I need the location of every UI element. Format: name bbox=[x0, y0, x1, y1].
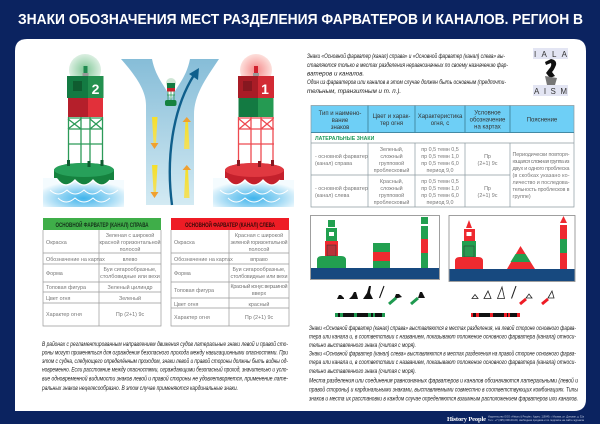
characteristics table: Условное bbox=[474, 110, 501, 116]
green buoy illustration, number 2: 2 bbox=[92, 81, 100, 97]
characteristics table: Пояснение bbox=[527, 118, 558, 124]
upper right intro text: Знаки «Основной фарватер (канал) справа» и «Основной фарватер (канал) слева» вы- bbox=[307, 53, 505, 60]
green lighted buoy bbox=[317, 220, 346, 268]
table: main fairway to the left: вверх bbox=[252, 291, 266, 297]
table: main fairway to the left: Форма bbox=[174, 271, 191, 277]
table: main fairway to the left: ОСНОВНОЙ ФАРВАТЕР (КАНАЛ) СЛЕВА bbox=[185, 220, 275, 229]
upper right intro text bbox=[307, 53, 508, 95]
characteristics table: обозначение bbox=[470, 118, 506, 124]
green buoy illustration, number 2 bbox=[43, 54, 124, 207]
characteristics table: тельность проблесков в bbox=[512, 187, 570, 193]
characteristics table: Пр bbox=[484, 154, 491, 160]
characteristics table: вание bbox=[332, 118, 349, 124]
lower right text block: тельно выставленного знака (считая с моря). bbox=[309, 342, 416, 349]
footer brand and imprint: Издательство ООО «History & People». Адрес: 119049, г. Москва, ул. Донская, д. 32а bbox=[488, 414, 584, 418]
characteristics table: пр 0,5 темн 0,5 bbox=[421, 147, 459, 153]
characteristics table: ЛАТЕРАЛЬНЫЕ ЗНАКИ bbox=[315, 136, 375, 142]
table: main fairway to the left: Характер огня bbox=[174, 315, 210, 321]
red cone buoy bbox=[507, 246, 535, 269]
characteristics table: Характеристика bbox=[418, 114, 463, 120]
table: main fairway to the left: столбовидные или вехи bbox=[230, 274, 288, 280]
table: main fairway to the right: Пр (2+1) 9с bbox=[116, 312, 144, 318]
characteristics table: огня, с bbox=[431, 121, 449, 127]
diagram: red fairway signs bbox=[449, 216, 575, 282]
red lighted buoy bbox=[455, 220, 483, 269]
characteristics table: группе) bbox=[512, 194, 531, 200]
characteristics table: - основной фарватер bbox=[315, 185, 368, 192]
table: main fairway to the left bbox=[171, 218, 289, 326]
characteristics table: ющаяся сложная группа из bbox=[512, 159, 570, 165]
characteristics table: (канал) слева bbox=[315, 193, 349, 199]
table: main fairway to the right: влево bbox=[123, 257, 137, 263]
table: main fairway to the left: полосой bbox=[249, 246, 269, 253]
table: main fairway to the right bbox=[43, 218, 161, 326]
diagram: green fairway signs bbox=[310, 216, 440, 280]
characteristics table bbox=[311, 106, 574, 207]
lower left text block: ральных знаков нецелесообразно. В этом случае применяются кардинальные знаки. bbox=[41, 385, 238, 392]
characteristics table: Зеленый, bbox=[380, 146, 404, 153]
characteristics table: личество и последова- bbox=[512, 180, 570, 186]
table: main fairway to the right: Зеленый цилиндр bbox=[108, 284, 152, 291]
table: main fairway to the right: ОСНОВНОЙ ФАРВАТЕР (КАНАЛ) СПРАВА bbox=[56, 220, 149, 229]
characteristics table: двух и одного проблеска bbox=[512, 166, 570, 172]
lower left text block: роны могут применяться для ограждения безопасного прохода между навигационными опасностями. При bbox=[41, 350, 288, 356]
characteristics table: групповой bbox=[379, 160, 404, 167]
table: main fairway to the left: Окраска bbox=[174, 240, 195, 246]
table: main fairway to the left: Обозначение на картах bbox=[174, 257, 233, 263]
lower left text block: этом с судна, следующего определённым проходом, знаки левой и правой стороны должны быть видны од- bbox=[42, 358, 288, 365]
table: main fairway to the left: Топовая фигура bbox=[174, 288, 214, 294]
lower left text block: новременно. Если расстояние между опасностями, ограждающими безопасный проход, значительно и усло- bbox=[42, 366, 288, 374]
table: main fairway to the right: Форма bbox=[46, 271, 63, 277]
characteristics table: Тип и наимено- bbox=[319, 111, 361, 117]
characteristics table: период 9,0 bbox=[427, 200, 453, 206]
title: ЗНАКИ ОБОЗНАЧЕНИЯ МЕСТ РАЗДЕЛЕНИЯ ФАРВАТЕРОВ И КАНАЛОВ. РЕГИОН В bbox=[18, 12, 583, 28]
green spar bbox=[421, 217, 428, 268]
characteristics table: проблесковый bbox=[374, 199, 409, 206]
red buoy illustration, number 1 bbox=[213, 54, 294, 207]
table: main fairway to the right: Характер огня bbox=[46, 312, 82, 318]
route arrow bbox=[170, 68, 199, 205]
IALA AISM logo: AISM bbox=[534, 87, 567, 96]
characteristics table: - основной фарватер bbox=[315, 153, 368, 160]
upper right intro text: Один из фарватеров или каналов в этом случае должен быть основным (предпочти- bbox=[307, 79, 506, 86]
characteristics table: пр 0,5 темн 1,0 bbox=[421, 154, 459, 160]
IALA AISM logo bbox=[533, 48, 568, 96]
traffic arrows bbox=[150, 117, 191, 198]
table: main fairway to the left: красный bbox=[249, 301, 269, 308]
characteristics table: (2+1) 9с bbox=[478, 161, 498, 167]
characteristics table: тер огня bbox=[380, 121, 403, 127]
footer brand and imprint: Тел.: +7 (495) 000-00-00, свободная продажа и по подписке на сайте журнала bbox=[488, 418, 584, 422]
red spar bbox=[560, 216, 567, 269]
footer brand and imprint: History People bbox=[447, 416, 486, 423]
light sequence bar: green bbox=[335, 313, 385, 317]
upper right intro text: тельным, транзитным и т. п.). bbox=[307, 88, 401, 95]
characteristics table: период 9,0 bbox=[427, 168, 453, 174]
table: main fairway to the right: Обозначение на картах bbox=[46, 257, 105, 263]
characteristics table: пр 0,5 темн 6,0 bbox=[421, 193, 459, 199]
table: main fairway to the right: Топовая фигура bbox=[46, 285, 86, 291]
lower right text block bbox=[308, 325, 578, 402]
characteristics table: Пр bbox=[484, 186, 491, 192]
characteristics table: пр 0,5 темн 1,0 bbox=[421, 186, 459, 192]
table: main fairway to the left: Цвет огня bbox=[174, 302, 199, 308]
table: main fairway to the left: Красный конус вершиной bbox=[230, 283, 288, 290]
characteristics table: проблесковый bbox=[374, 167, 409, 174]
characteristics table: пр 0,5 темн 6,0 bbox=[421, 161, 459, 167]
table: main fairway to the left: Буи сигарообразные, bbox=[232, 267, 286, 273]
table: main fairway to the right: красной горизонтальной bbox=[99, 239, 161, 246]
table: main fairway to the right: полосой bbox=[120, 246, 140, 253]
light sequence bar: red bbox=[471, 313, 520, 317]
upper right intro text: ватеров и каналов. bbox=[307, 70, 364, 78]
characteristics table: сложный bbox=[380, 153, 403, 160]
characteristics table: Цвет и харак- bbox=[373, 114, 410, 120]
table: main fairway to the right: столбовидные или вехи bbox=[100, 274, 160, 280]
characteristics table: пр 0,5 темн 0,5 bbox=[421, 179, 459, 185]
characteristics table: групповой bbox=[379, 192, 404, 199]
channel diagram bbox=[121, 59, 219, 205]
characteristics table: сложный bbox=[380, 185, 403, 192]
mini buoy bbox=[165, 78, 176, 106]
table: main fairway to the left: зеленой горизонтальной bbox=[230, 239, 288, 246]
lower left text block: В районах с регламентированным направлением движения судов латеральные знаки левой и правой сто- bbox=[42, 341, 288, 348]
green can buoy bbox=[373, 243, 390, 268]
table: main fairway to the right: Зеленая с широкой bbox=[106, 232, 154, 239]
lower left text block bbox=[41, 341, 288, 392]
characteristics table: знаков bbox=[331, 125, 349, 131]
table: main fairway to the left: Пр (2+1) 9с bbox=[245, 315, 273, 321]
characteristics table: (в скобках указано ко- bbox=[512, 173, 570, 179]
red buoy illustration, number 1: 1 bbox=[261, 81, 269, 97]
characteristics table: на картах bbox=[474, 124, 501, 130]
IALA AISM logo: IALA bbox=[534, 50, 568, 59]
characteristics table: (2+1) 9с bbox=[478, 193, 498, 199]
table: main fairway to the right: Буи сигарообразные, bbox=[103, 267, 157, 273]
characteristics table: (канал) справа bbox=[315, 161, 352, 167]
table: main fairway to the left: Красная с широкой bbox=[235, 232, 283, 239]
lower right text block: тельно выставленного знака (считая с моря). bbox=[309, 368, 416, 375]
upper right intro text: ставляются только в местах разделения неравнозначных по своему назначению фар- bbox=[307, 62, 508, 69]
characteristics table: Красный, bbox=[380, 178, 404, 185]
lower left text block: вие одновременной видимости знаков левой и правой стороны не удовлетворяется, применение лате- bbox=[42, 376, 288, 382]
chart symbols: green bbox=[337, 286, 425, 304]
characteristics table: Периодически повторя- bbox=[512, 152, 570, 158]
table: main fairway to the right: Зеленый bbox=[119, 295, 141, 302]
footer brand and imprint bbox=[447, 414, 584, 423]
table: main fairway to the left: вправо bbox=[250, 257, 268, 263]
table: main fairway to the right: Цвет огня bbox=[46, 296, 71, 302]
table: main fairway to the right: Окраска bbox=[46, 240, 67, 246]
chart symbols: red bbox=[472, 286, 554, 304]
